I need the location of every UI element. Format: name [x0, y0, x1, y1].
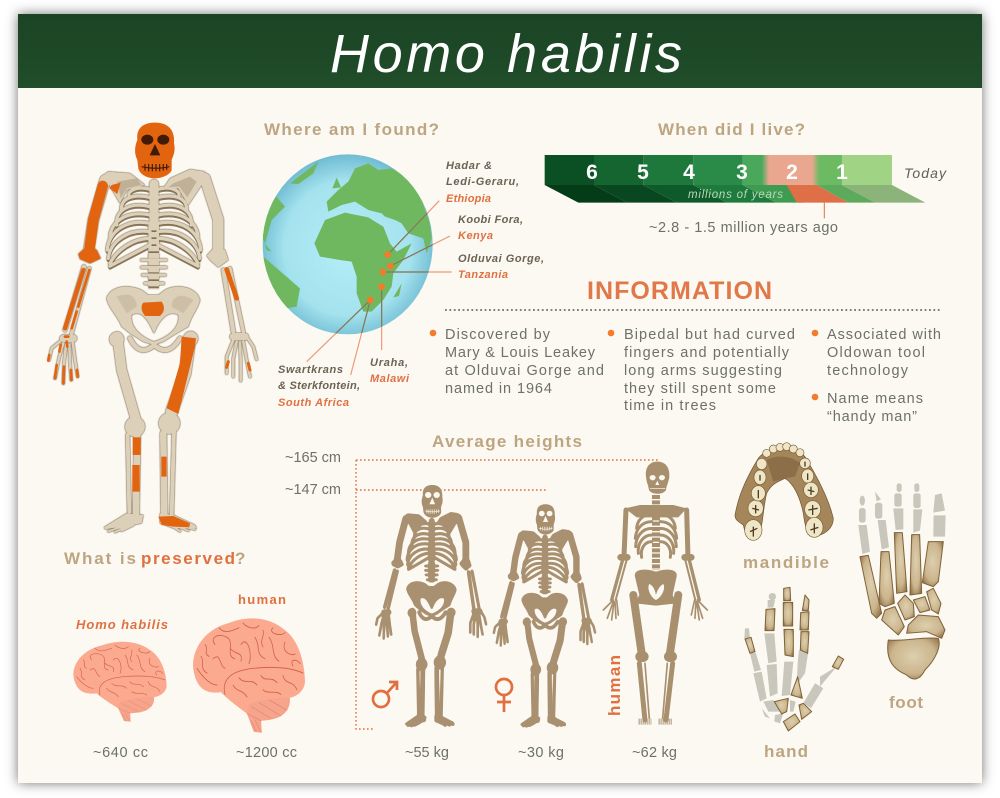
timeline numbers: 3 [736, 161, 748, 184]
leader lines [307, 201, 452, 375]
timeline numbers: 1 [836, 161, 848, 184]
label: South Africa: South Africa [278, 397, 349, 409]
fossil: hand [744, 587, 844, 731]
label: mandible: mandible [743, 553, 829, 572]
timeline labels: Today [904, 165, 947, 181]
label: Kenya [458, 214, 523, 242]
skull [135, 123, 175, 178]
timeline chart: millions of years [688, 189, 783, 201]
bullet: discovery: named in 1964 [445, 381, 552, 397]
heading: information: INFORMATION [587, 277, 772, 305]
brain: human: human [238, 592, 286, 607]
bullet: bipedal: time in trees [624, 398, 716, 414]
brain: human [193, 592, 305, 761]
label: Malawi [370, 357, 410, 385]
preserved foot bones [860, 533, 945, 679]
heading: what is preserved: ? [235, 549, 245, 568]
height scale lines: ~147 cm [285, 482, 341, 498]
weight labels: ~55 kg [405, 745, 449, 761]
silhouette: human [603, 462, 707, 722]
timeline lower band [545, 185, 925, 203]
heading: what is preserved [64, 549, 245, 568]
weight labels: ~30 kg [518, 745, 564, 761]
range tick [823, 203, 826, 218]
fossil: mandible [735, 443, 833, 540]
label: Ethiopia: Ethiopia [446, 193, 491, 205]
timeline numbers [586, 161, 848, 184]
height scale lines [285, 450, 660, 729]
bullet: bipedal [608, 327, 795, 414]
bullet: bipedal: fingers and potentially [624, 345, 790, 361]
weight labels [405, 745, 677, 761]
header banner [18, 14, 982, 88]
timeline numbers: 4 [683, 161, 695, 184]
height scale lines: ~165 cm [285, 450, 341, 466]
label: Ethiopia [446, 160, 519, 205]
heading: where am I found: Where am I found? [264, 120, 439, 139]
silhouette: female Homo habilis [494, 504, 595, 727]
heading: what is preserved: What is [64, 549, 136, 568]
label: South Africa: & Sterkfontein, [278, 380, 360, 392]
heading: average heights: Average heights [432, 432, 582, 451]
heading: when did I live: When did I live? [658, 120, 805, 139]
brain: Homo habilis [73, 617, 168, 761]
label: Malawi: Uraha, [370, 357, 408, 369]
timeline numbers: 5 [637, 161, 649, 184]
icon: male symbol [373, 682, 397, 707]
label: Kenya: Kenya [458, 230, 493, 242]
preserved fragments in orange [48, 183, 250, 527]
bullet: tools: technology [827, 363, 909, 379]
label: Ethiopia: Hadar & [446, 160, 492, 172]
label: foot: foot [889, 693, 923, 712]
illustration: preserved skeleton [48, 123, 257, 532]
bullet: tools [812, 327, 941, 379]
map: globe with find sites [258, 154, 452, 375]
bullet: tools: Oldowan tool [827, 345, 925, 361]
label: human rotated: human [605, 655, 624, 716]
bullet: discovery: Discovered by [445, 327, 551, 343]
heading: what is preserved: preserved [141, 549, 235, 568]
bullet: bipedal: long arms suggesting [624, 363, 782, 379]
brain: Homo habilis: ~640 cc [93, 745, 148, 761]
bullet: discovery [430, 327, 604, 397]
icon: female symbol [496, 679, 512, 712]
site dots [367, 251, 394, 303]
label: South Africa [278, 364, 360, 409]
fossil: foot [858, 483, 946, 679]
timeline chart: ~2.8 - 1.5 million years ago [649, 220, 838, 236]
timeline top band [545, 155, 892, 185]
title: Homo habilis [330, 24, 682, 84]
preserved hand bones [745, 587, 844, 731]
weight labels: ~62 kg [632, 745, 677, 761]
scapula shading [117, 177, 197, 313]
leader lines over globe [335, 212, 433, 334]
label: South Africa: Swartkrans [278, 364, 343, 376]
rib shading [107, 190, 201, 288]
bullet: discovery: at Olduvai Gorge and [445, 363, 604, 379]
timeline numbers: 6 [586, 161, 598, 184]
bullet: bipedal: Bipedal but had curved [624, 327, 795, 343]
bullet: tools: Associated with [827, 327, 941, 343]
bullet: name: Name means [827, 391, 923, 407]
bullet: discovery: Mary & Louis Leakey [445, 345, 596, 361]
brain: Homo habilis: Homo habilis [76, 617, 168, 632]
label: Tanzania [458, 253, 544, 281]
label: Malawi: Malawi [370, 373, 410, 385]
missing toe bones [858, 483, 946, 554]
brain: human: ~1200 cc [236, 745, 297, 761]
silhouette: male Homo habilis [376, 485, 486, 727]
bullet: name [812, 391, 923, 425]
missing hand bones [744, 593, 837, 723]
timeline numbers: 2 [786, 161, 798, 184]
label: Tanzania: Tanzania [458, 269, 508, 281]
label: Tanzania: Olduvai Gorge, [458, 253, 544, 265]
bullet: bipedal: they still spent some [624, 381, 776, 397]
bullet: name: “handy man” [827, 409, 917, 425]
label: Ethiopia: Ledi-Geraru, [446, 176, 519, 188]
timeline chart [545, 155, 947, 236]
label: Kenya: Koobi Fora, [458, 214, 523, 226]
bones [49, 169, 257, 532]
label: hand: hand [764, 742, 808, 761]
